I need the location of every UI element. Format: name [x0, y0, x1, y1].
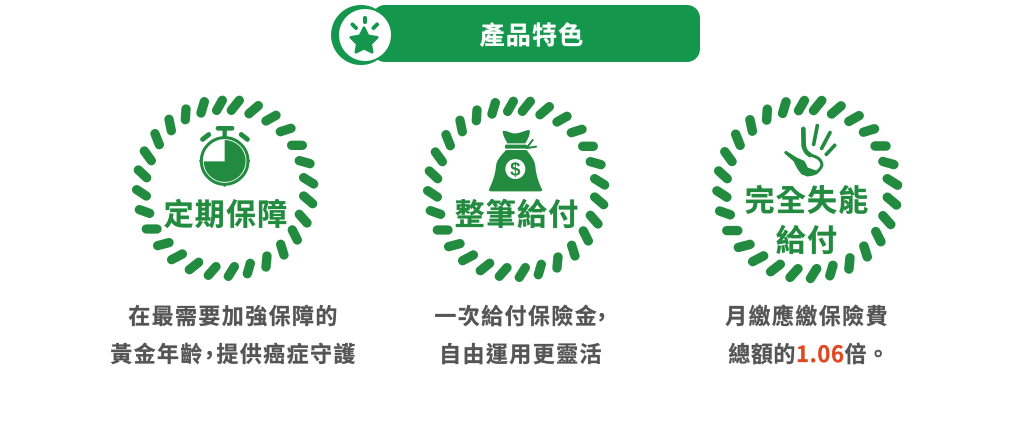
header banner [331, 5, 700, 65]
icon: hand [786, 126, 835, 175]
panel: total disability payment [717, 101, 898, 369]
description: 自由運用更靈活 [439, 337, 603, 369]
label: 整筆給付 [455, 190, 579, 234]
dashed ring [717, 101, 898, 278]
panel: fixed-term protection [110, 100, 357, 369]
label: 完全失能 [745, 176, 869, 220]
icon: star badge [331, 5, 391, 65]
description: 總額的1.06倍。 [728, 337, 890, 369]
dollar sign: $ [510, 159, 521, 180]
banner bar [372, 5, 700, 62]
description: , [206, 330, 214, 362]
description [725, 299, 890, 369]
description: 月繳應繳保險費 [725, 299, 889, 331]
icon: stopwatch [199, 128, 250, 187]
label: 定期保障 [164, 190, 288, 234]
heading: 產品特色 [480, 16, 584, 52]
description [434, 292, 607, 369]
panel: lump sum payment [428, 101, 607, 369]
dashed ring [137, 100, 314, 276]
icon: money bag [489, 130, 542, 191]
description: , [598, 292, 607, 324]
description [110, 299, 357, 369]
description: 一次給付保險金 [434, 299, 598, 331]
dashed ring [428, 101, 605, 277]
label [745, 176, 869, 260]
label: 給付 [776, 216, 838, 260]
description: 黃金年齡 [110, 337, 204, 369]
description: 提供癌症守護 [216, 337, 357, 369]
description: 在最需要加強保障的 [128, 299, 339, 331]
